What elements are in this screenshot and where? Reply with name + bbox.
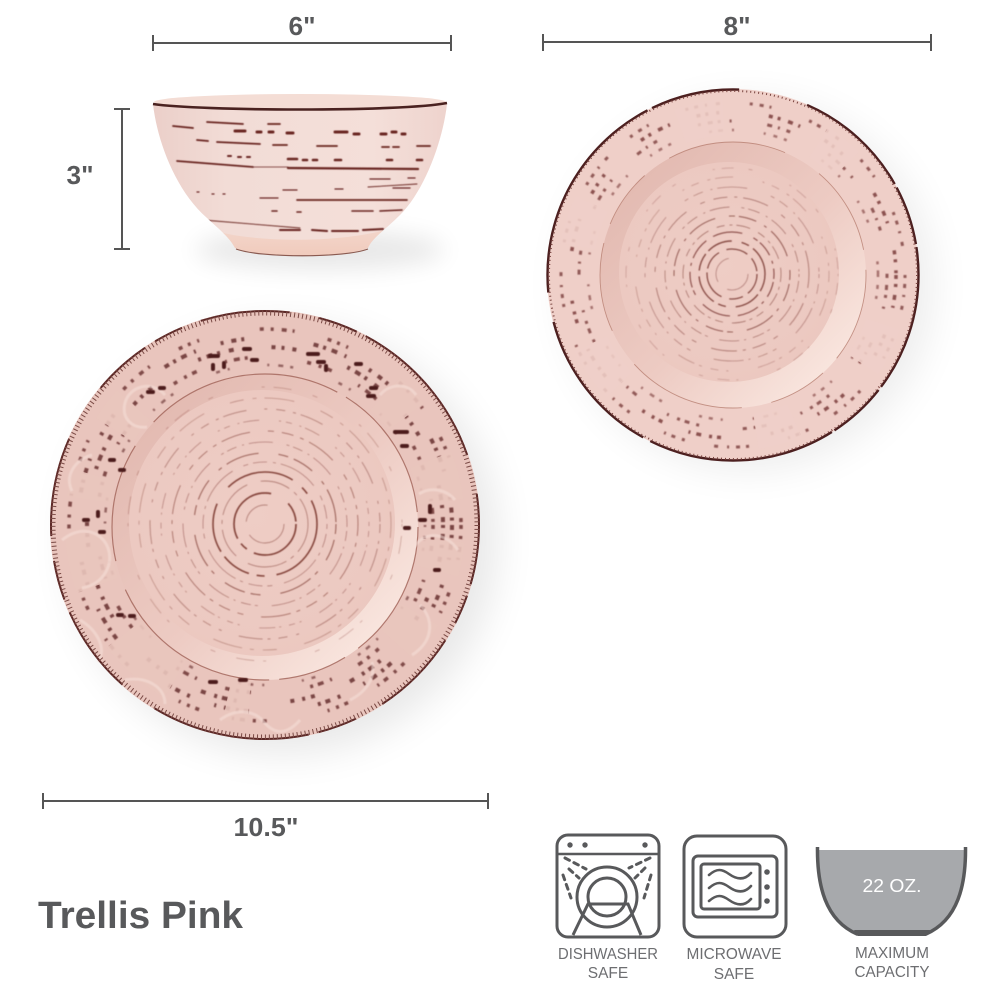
icon: microwave safe: [684, 836, 786, 937]
bowl photo: [153, 94, 447, 270]
icon: dishwasher safe: [557, 835, 659, 937]
dimension: 3 inch bowl height: [66, 109, 130, 249]
embossed rim scrolls: [62, 386, 458, 732]
salad plate concentric rings: [626, 168, 838, 380]
dimension: 10.5 inch plate width: 10.5": [234, 812, 298, 842]
10.5 inch dinner plate photo: [50, 310, 497, 754]
dimension: 3 inch bowl height: 3": [66, 160, 94, 190]
8 inch salad plate photo: [547, 89, 933, 470]
dinner plate rim speckles: [69, 329, 461, 721]
label: maximum capacity: MAXIMUM: [855, 945, 929, 962]
salad plate rim speckles: [561, 103, 905, 447]
icon: bowl maximum capacity: 22 OZ.: [862, 876, 922, 896]
dimension: 8 inch plate width: 8": [724, 11, 750, 41]
dimension: 6 inch bowl width: 6": [288, 11, 316, 41]
dinner plate heavy speckle clusters: [84, 349, 439, 682]
dimension: 6 inch bowl width: [153, 11, 451, 51]
label: dishwasher safe: DISHWASHER: [558, 946, 658, 963]
dinner plate edge: [51, 311, 479, 739]
dinner plate clear rim zones: [87, 347, 443, 703]
icon: bowl maximum capacity: [817, 847, 966, 936]
label: maximum capacity: CAPACITY: [854, 964, 930, 981]
label: dishwasher safe: SAFE: [588, 965, 628, 982]
dinner plate concentric rings: [128, 387, 402, 661]
label: microwave safe: SAFE: [714, 966, 754, 983]
salad plate edge: [548, 90, 918, 460]
salad plate clear rim zones: [575, 117, 891, 433]
dimension: 10.5 inch plate width: [43, 793, 488, 842]
dimension: 8 inch plate width: [543, 11, 931, 51]
label: microwave safe: MICROWAVE: [686, 946, 782, 963]
title: Trellis Pink: [38, 895, 244, 937]
